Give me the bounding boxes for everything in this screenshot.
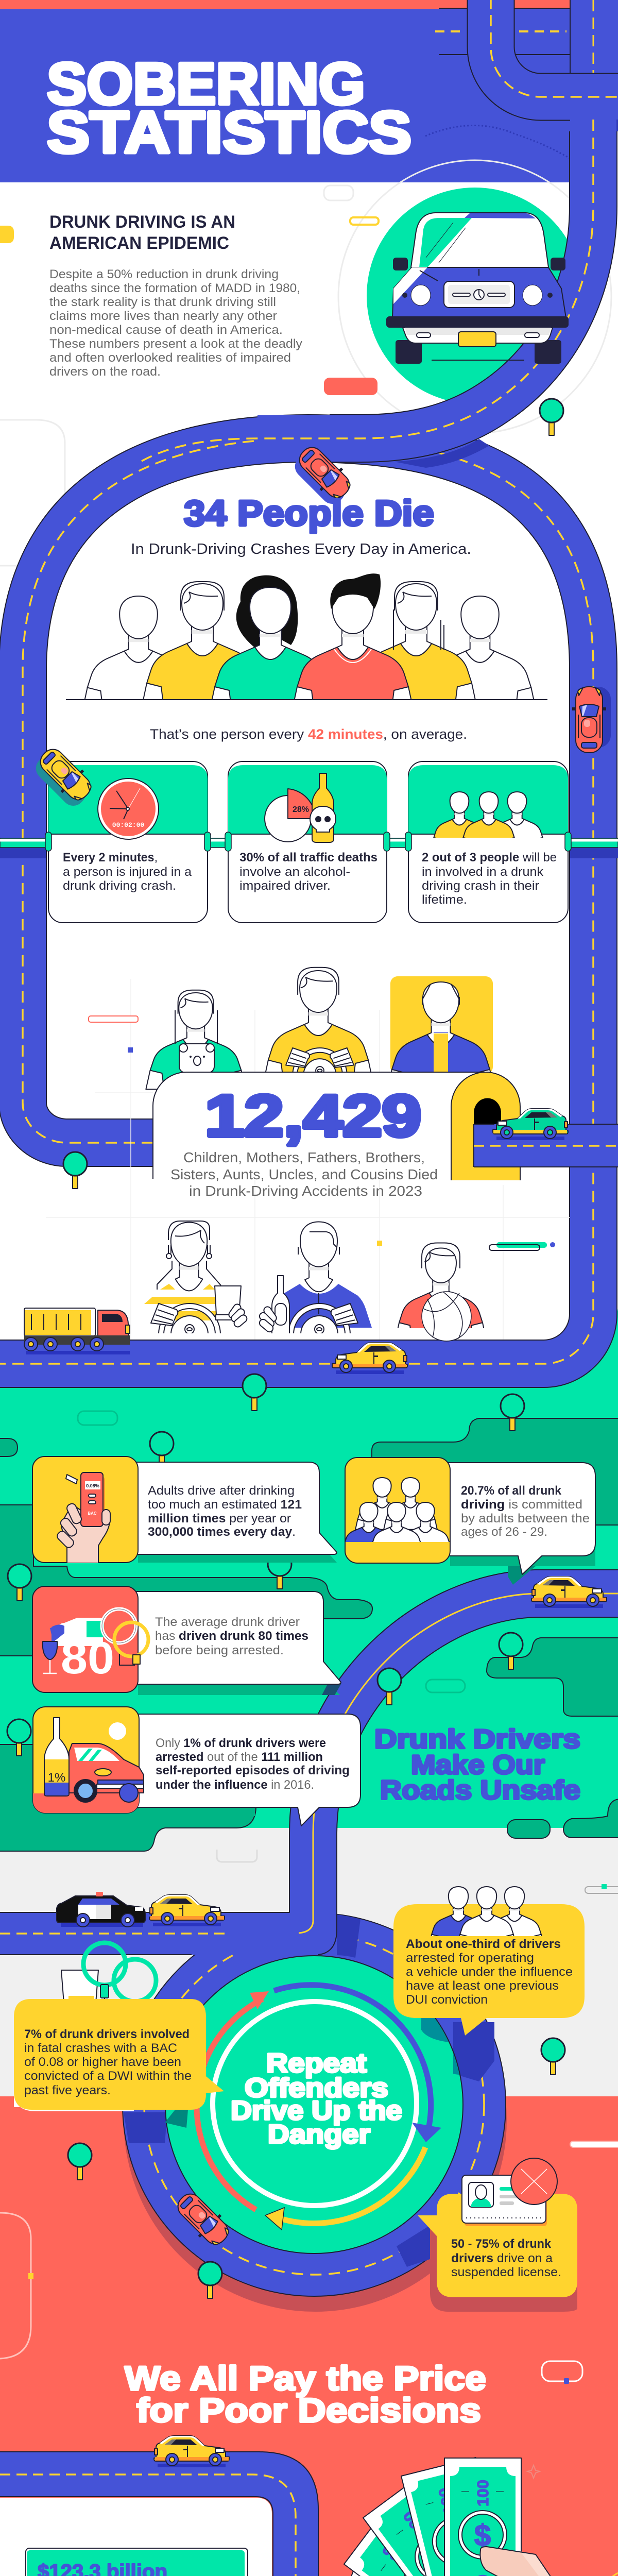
stat panel: $123.3 billion — [26, 2548, 248, 2576]
arrow: blue — [274, 1985, 441, 2142]
callout text: drivers drive on a — [451, 2251, 553, 2265]
title: SOBERING — [47, 52, 365, 117]
icon: clock — [98, 778, 159, 839]
icon: big car front view — [386, 213, 569, 364]
card text: by adults between the — [461, 1512, 590, 1526]
car: red top view on right — [572, 687, 611, 753]
card: 30% of all traffic deaths — [228, 761, 387, 923]
icon: three people — [433, 791, 543, 838]
decorative shapes, intro — [0, 125, 611, 566]
callout text: DUI conviction — [406, 1993, 488, 2007]
callout: 7% of drunk drivers — [14, 1999, 224, 2128]
card text — [156, 1736, 350, 1792]
car: red crashing on road — [289, 440, 357, 509]
car: yellow on curve road — [531, 1577, 607, 1608]
title: STATISTICS — [47, 100, 411, 165]
callout: about one third — [393, 1887, 585, 2036]
intro paragraph: and often overlooked realities of impaired — [49, 351, 291, 365]
heading: repeat offenders drive up the danger: Drive Up the — [231, 2096, 402, 2126]
intro paragraph: These numbers present a look at the deadly — [49, 337, 302, 351]
card text: under the influence in 2016. — [156, 1778, 314, 1792]
callout text: a vehicle under the influence — [406, 1965, 573, 1979]
police car — [57, 1892, 145, 1927]
icon: clock: 00:02:00 — [112, 821, 144, 829]
card: only 1% arrested — [33, 1707, 360, 1826]
heading: we all pay the price: We All Pay the Price — [125, 2359, 486, 2397]
heading: drunk drivers make our roads unsafe: Make Our — [411, 1750, 545, 1780]
person: older man on yellow panel — [387, 976, 494, 1091]
card text: Only 1% of drunk drivers were — [156, 1736, 326, 1750]
card text: million times per year or — [148, 1512, 291, 1526]
heading: we all pay the price — [125, 2359, 486, 2429]
callout text: 50 - 75% of drunk — [451, 2237, 552, 2251]
outlined pills on green — [78, 1411, 465, 1692]
description: in Drunk-Driving Accidents in 2023 — [189, 1183, 422, 1199]
small shapes — [89, 1016, 555, 1250]
card text: a person is injured in a — [63, 865, 192, 879]
heading: repeat offenders drive up the danger: Repeat — [266, 2048, 367, 2078]
card: 20.7% of all drunk driving — [342, 1458, 595, 1585]
tree — [540, 399, 563, 435]
card: 121 million times — [32, 1456, 337, 1563]
card text: 20.7% of all drunk — [461, 1484, 562, 1498]
heading: drunk driving is an american epidemic: DRUNK DRIVING IS AN — [49, 212, 235, 232]
card text: driving crash in their — [422, 879, 539, 893]
card text: The average drunk driver — [155, 1615, 300, 1629]
small decorations, grey and coral — [0, 1850, 618, 2576]
intro paragraph: deaths since the formation of MADD in 1980, — [49, 281, 300, 295]
car: yellow behind police — [149, 1895, 225, 1926]
car: green leaving tunnel — [493, 1109, 568, 1140]
card text: too much an estimated 121 — [148, 1498, 302, 1512]
card text — [239, 851, 377, 893]
horizontal road meets vertical road — [0, 1901, 337, 1955]
person: white right — [456, 596, 535, 699]
guard rails — [0, 838, 618, 858]
card: driven drunk 80 times — [32, 1586, 341, 1695]
intro paragraph: the stark reality is that drunk driving still — [49, 295, 276, 309]
car: yellow on road box — [154, 2436, 229, 2467]
card text — [461, 1484, 590, 1539]
card text: 300,000 times every day . — [148, 1525, 296, 1539]
trees in green section — [7, 1374, 524, 1756]
icon: wine, handcuffs and 80: 80 — [61, 1632, 114, 1683]
person: man driver with bottle — [258, 1222, 372, 1334]
card text: involve an alcohol- — [239, 865, 350, 879]
tunnel callout box — [153, 1072, 520, 1199]
green circle behind car — [367, 188, 583, 404]
card text — [63, 851, 192, 893]
arrow: coral — [197, 1991, 269, 2210]
arch road — [0, 438, 593, 1364]
heading: drunk driving is an american epidemic — [49, 212, 235, 253]
intro paragraph — [49, 267, 302, 379]
callout text — [406, 1937, 573, 2007]
icon: hand holding money — [344, 2456, 551, 2576]
truck — [24, 1308, 130, 1354]
car: yellow on bottom road — [332, 1343, 407, 1374]
shadow of callout on disc — [421, 2018, 459, 2075]
intro paragraph: claims more lives than nearly any other — [49, 309, 277, 323]
icon: three people — [431, 1886, 542, 1936]
icon: breathalyzer in hand: BAC — [88, 1511, 97, 1516]
callout text: About one-third of drivers — [406, 1937, 561, 1951]
person: yellow left — [143, 581, 240, 699]
person: girl with teddy bear — [146, 990, 246, 1089]
card text: Adults drive after drinking — [148, 1484, 295, 1498]
callout: 50-75% suspended license — [418, 2158, 577, 2312]
heading: drunk driving is an american epidemic: AMERICAN EPIDEMIC — [49, 233, 229, 253]
person: yellow right — [380, 581, 476, 699]
card text: has driven drunk 80 times — [155, 1629, 308, 1643]
sparkle — [527, 2465, 540, 2478]
person: white left — [84, 596, 162, 699]
person: driver in yellow shirt — [264, 968, 373, 1082]
card text: ages of 26 - 29. — [461, 1525, 547, 1539]
person: man in coral — [294, 573, 412, 699]
trees around ring — [68, 2038, 565, 2576]
callout text: in fatal crashes with a BAC — [24, 2041, 177, 2055]
road box — [0, 2452, 318, 2576]
card text: Every 2 minutes, — [63, 851, 158, 865]
card: every 2 minutes — [48, 761, 208, 923]
road exiting tunnel — [474, 1124, 618, 1167]
icon: bottle and car — [33, 1718, 144, 1814]
dark green terrain — [0, 1418, 618, 1851]
intro paragraph: non-medical cause of death in America. — [49, 323, 283, 337]
card text: 2 out of 3 people will be — [422, 851, 557, 865]
icon: bottle and car: 1% — [48, 1771, 65, 1785]
heading: we all pay the price: for Poor Decisions — [136, 2391, 481, 2429]
icon: group of five people — [346, 1477, 450, 1542]
card text — [148, 1484, 302, 1539]
icon: pie chart, bottle and skull — [265, 773, 336, 842]
card text: before being arrested. — [155, 1643, 284, 1657]
rail connectors — [45, 832, 571, 851]
big number: 12,429 — [205, 1083, 421, 1149]
sentence: one person every 42 minutes: That’s one person every 42 minutes, on average. — [150, 726, 467, 742]
car: red on ring road — [171, 2187, 235, 2251]
faint grid lines — [46, 979, 570, 1340]
cycle arrows — [197, 1985, 441, 2230]
icon: glass and green handcuffs — [61, 1943, 156, 2017]
person: woman in green — [211, 575, 312, 699]
person: woman driver with drink — [144, 1221, 248, 1334]
row baseline — [66, 699, 547, 700]
title — [47, 52, 411, 165]
intro paragraph: Despite a 50% reduction in drunk driving — [49, 267, 279, 281]
callout text: suspended license. — [451, 2265, 561, 2279]
icon: breathalyzer in hand — [56, 1472, 110, 1563]
description — [170, 1149, 438, 1199]
description: Children, Mothers, Fathers, Brothers, — [183, 1149, 425, 1165]
heading: repeat offenders drive up the danger: Offenders — [245, 2073, 388, 2103]
arrow: yellow — [265, 2147, 425, 2230]
heading: 34 people die: 34 People Die — [184, 493, 434, 533]
curving road, section two — [313, 1594, 618, 1922]
icon: pie chart, bottle and skull: 28% — [293, 805, 309, 814]
header cross roads — [435, 0, 618, 120]
callout text: have at least one previous — [406, 1979, 559, 1993]
heading: drunk drivers make our roads unsafe: Drunk Drivers — [374, 1724, 580, 1754]
intro paragraph: drivers on the road. — [49, 365, 161, 379]
car: yellow top view crashing into card — [30, 742, 98, 810]
card: 2 out of 3 people — [408, 761, 568, 923]
person: boy with ball — [396, 1243, 486, 1341]
callout text — [451, 2237, 561, 2279]
description: Sisters, Aunts, Uncles, and Cousins Died — [170, 1166, 438, 1182]
people row — [82, 573, 536, 711]
card text: impaired driver. — [239, 879, 331, 893]
tree — [63, 1152, 87, 1189]
heading: repeat offenders drive up the danger — [231, 2048, 402, 2149]
callout text: arrested for operating — [406, 1951, 534, 1965]
ring road — [123, 1913, 506, 2296]
heading: drunk drivers make our roads unsafe — [374, 1724, 580, 1805]
card text: arrested out of the 111 million — [156, 1750, 323, 1764]
callout text: 7% of drunk drivers involved — [24, 2027, 190, 2041]
shadow of ring road — [124, 2107, 507, 2312]
callout text: past five years. — [24, 2083, 111, 2097]
card text — [422, 851, 557, 907]
card text: drunk driving crash. — [63, 879, 176, 893]
card text: lifetime. — [422, 893, 467, 907]
icon: wine, handcuffs and 80 — [43, 1609, 148, 1683]
heading: drunk drivers make our roads unsafe: Roads Unsafe — [380, 1775, 580, 1805]
callout text — [24, 2027, 192, 2097]
main road from the top right — [142, 117, 618, 468]
subheading: In Drunk-Driving Crashes Every Day in America. — [131, 541, 471, 557]
icon: license with cross — [462, 2158, 557, 2226]
callout text: convicted of a DWI within the — [24, 2069, 192, 2083]
card text: 30% of all traffic deaths — [239, 851, 377, 865]
card text: self-reported episodes of driving — [156, 1764, 350, 1777]
callout text: of 0.08 or higher have been — [24, 2055, 181, 2069]
card text — [155, 1615, 308, 1657]
icon: breathalyzer in hand: 0.08% — [86, 1483, 99, 1488]
card text: driving is committed — [461, 1498, 582, 1512]
card text: in involved in a drunk — [422, 865, 544, 879]
heading: repeat offenders drive up the danger: Danger — [268, 2120, 370, 2149]
